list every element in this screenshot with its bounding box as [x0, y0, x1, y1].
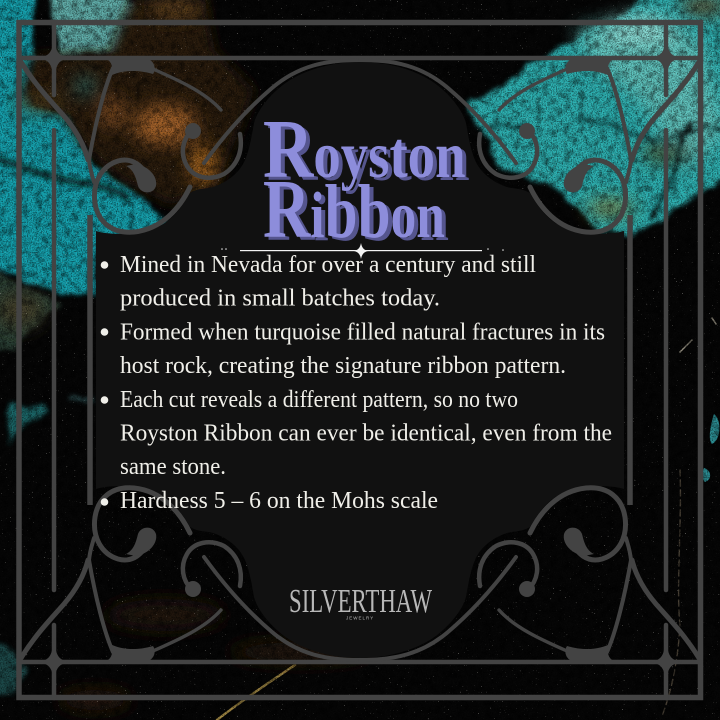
title face: Ribbon — [263, 163, 445, 256]
title face — [263, 102, 466, 256]
stone: left-side veins — [0, 158, 128, 198]
bullet 1: produced in small batches today. — [120, 286, 440, 312]
bullet 3 — [101, 387, 612, 480]
stone: turquoise, top right — [465, 0, 720, 238]
bullet 4: Hardness 5 – 6 on the Mohs scale — [120, 488, 438, 514]
specks above body text — [221, 248, 504, 251]
stone: brown and orange matrix, top left — [20, 0, 255, 205]
bullet 1 — [101, 252, 536, 312]
logo: SILVERTHAW — [289, 583, 433, 620]
logo — [289, 583, 433, 620]
title — [263, 102, 470, 259]
title shadow: Ribbon — [267, 166, 449, 259]
stone: veins and speckle on dark area — [217, 318, 716, 720]
divider with star — [240, 243, 482, 259]
bullet 2 — [101, 319, 605, 379]
title shadow: Royston — [267, 105, 470, 198]
bullet 2: host rock, creating the signature ribbon pattern. — [120, 353, 566, 379]
title shadow — [267, 105, 470, 259]
bullet list — [101, 252, 612, 514]
stone: teal fleck, right edge — [703, 414, 719, 482]
bullet 2: Formed when turquoise filled natural fractures in its — [120, 319, 605, 345]
center panel — [96, 62, 624, 658]
title face: Royston — [263, 102, 466, 195]
bullet 3: Royston Ribbon can ever be identical, even from the — [120, 420, 612, 446]
bullet 3: same stone. — [120, 454, 226, 480]
stone: turquoise, left side — [0, 0, 176, 695]
logo: JEWELRY — [346, 616, 374, 620]
bullet 3: Each cut reveals a different pattern, so no two — [120, 387, 518, 413]
bullet 1: Mined in Nevada for over a century and still — [120, 252, 536, 278]
